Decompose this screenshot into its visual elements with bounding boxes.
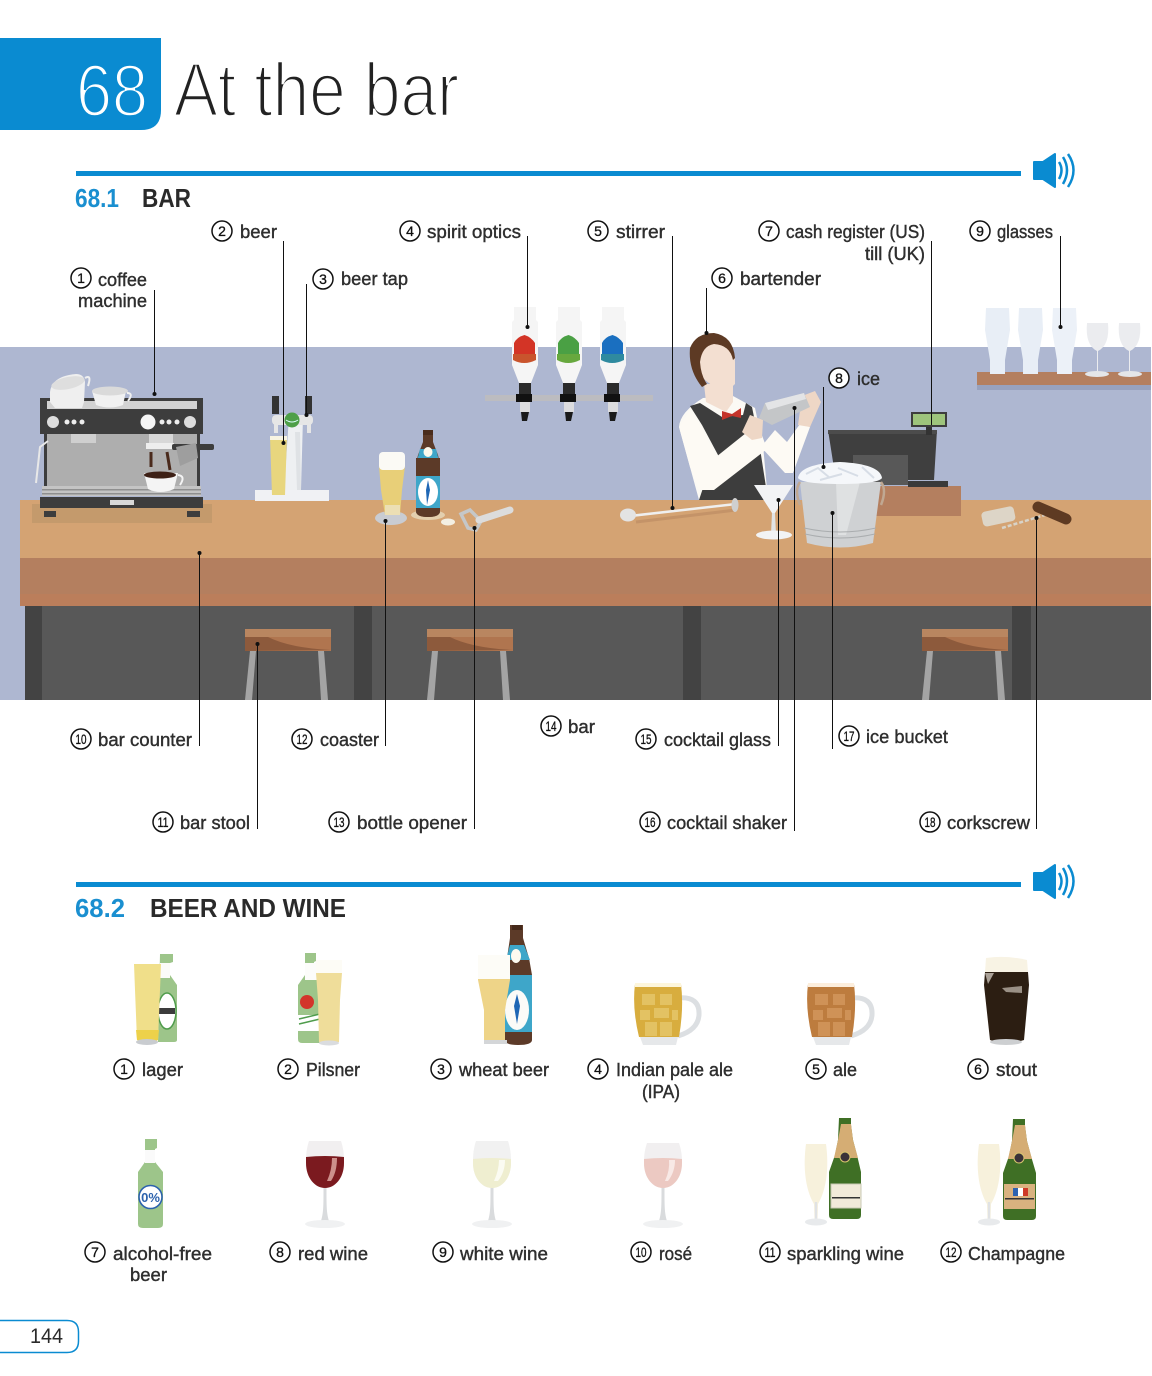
apron [690,403,768,500]
spirit optics [485,307,653,421]
label 8 red wine: 8 [276,1244,284,1260]
label 4 Indian pale ale: Indian pale ale [616,1060,733,1080]
label 14 bar: 14 [546,718,557,734]
label 8 ice: 8 [835,370,843,386]
section 68.1 header: 68.1 [75,183,119,213]
label 9 glasses [970,221,1053,242]
label 9 glasses: glasses [997,222,1053,242]
icon: Pilsner [298,953,342,1046]
label 14 bar: bar [568,717,595,737]
label 9 white wine: white wine [459,1244,548,1264]
label 4 Indian pale ale [588,1059,733,1102]
chapter number tab: 68 [76,51,148,132]
section 68.1 header: BAR [142,183,191,213]
cocktail shaker [759,393,810,425]
label 8 red wine [270,1242,368,1264]
beer bottle [411,430,445,520]
section 68.2 header [75,882,1021,923]
label 4 spirit optics: spirit optics [427,222,521,242]
label 3 wheat beer: 3 [437,1061,445,1077]
label 4 Indian pale ale: (IPA) [642,1082,680,1102]
chapter number tab [0,38,161,132]
label 8 ice [829,368,880,389]
label 17 ice bucket: 17 [844,728,855,744]
label 5 stirrer [588,221,665,242]
bar counter [20,500,1151,700]
label 6 bartender: 6 [718,270,726,286]
title: At the bar [174,48,459,133]
label 4 spirit optics: 4 [406,223,414,239]
label 6 bartender: bartender [740,269,821,289]
label 6 stout: stout [996,1060,1037,1080]
stirrer [620,498,738,522]
label 10 rosé: 10 [636,1244,647,1260]
icon: ale mug [807,983,872,1045]
label 11 sparkling wine: 11 [764,1244,776,1260]
label 6 stout [968,1059,1037,1080]
label 7 cash register [759,221,925,264]
icon: rosé [643,1143,683,1228]
label 9 glasses: 9 [976,223,984,239]
label 3 wheat beer: wheat beer [458,1060,549,1080]
leader lines [152,236,1062,831]
label 3 beer tap: beer tap [341,269,408,289]
wheat beer glass on coaster [375,452,407,525]
glasses on shelf [977,308,1151,390]
icon: red wine [305,1141,345,1228]
label 14 bar [541,716,595,737]
label 4 Indian pale ale: 4 [594,1061,602,1077]
ice bucket with ice [797,462,884,548]
label 15 cocktail glass: 15 [640,731,652,747]
label 18 corkscrew [920,812,1031,833]
bar scene [0,307,1151,700]
bar stools [245,629,1008,700]
label 18 corkscrew: corkscrew [947,813,1031,833]
cups on machine [50,374,85,408]
label 2 Pilsner: 2 [284,1061,292,1077]
label 1 coffee machine: coffee [98,270,147,290]
label 10 bar counter: 10 [76,731,87,747]
label 2 Pilsner: Pilsner [306,1060,360,1080]
label 17 ice bucket: ice bucket [866,727,948,747]
label 10 bar counter: bar counter [98,730,192,750]
label 5 ale: ale [833,1060,857,1080]
icon: audio speaker 2 [1034,865,1074,898]
label 1 lager: lager [142,1060,183,1080]
label 8 red wine: red wine [298,1244,368,1264]
wall [0,347,1151,700]
icon: audio speaker 1 [1034,154,1074,187]
label 12 coaster: 12 [296,731,308,747]
label 13 bottle opener: 13 [334,814,345,830]
beer tap and glass [255,396,329,501]
label 5 ale: 5 [812,1061,820,1077]
label 1 coffee machine: 1 [77,270,85,286]
label 2 Pilsner [278,1059,360,1080]
corkscrew [981,506,1066,528]
label 18 corkscrew: 18 [924,814,936,830]
torso shirt [679,396,768,500]
label 7 alcohol-free beer: alcohol-free [113,1244,212,1264]
label 11 sparkling wine: sparkling wine [787,1244,904,1264]
hands [742,415,763,440]
hair [690,333,735,387]
page number tab: 144 [30,1325,63,1348]
label 5 stirrer: 5 [594,223,602,239]
label 12 coaster [292,729,379,750]
icon: sparkling wine [805,1118,861,1226]
label 13 bottle opener: bottle opener [357,813,467,833]
label 3 beer tap: 3 [319,271,327,287]
label 16 cocktail shaker: 16 [644,814,656,830]
bottle opener [461,510,510,530]
icon: lager [134,954,177,1045]
bartender [679,333,821,500]
label 1 lager [114,1059,183,1080]
label 12 Champagne: 12 [946,1244,957,1260]
arms [679,410,767,490]
icon: alcohol-free beer: 0% [141,1190,160,1205]
coffee machine [32,374,214,523]
icon: alcohol-free beer [138,1139,163,1228]
icon: Indian pale ale mug [634,983,699,1045]
icon: stout [984,957,1029,1045]
label 3 beer tap [313,269,408,289]
label 2 beer [212,221,277,242]
label 9 white wine [433,1242,548,1264]
label 11 bar stool [153,812,250,833]
cocktail glass [754,485,793,540]
label 15 cocktail glass: cocktail glass [664,730,771,750]
label 11 bar stool: bar stool [180,813,250,833]
page number tab [0,1320,78,1352]
label 6 stout: 6 [974,1061,982,1077]
section 68.2 header: 68.2 [75,893,125,923]
icon: white wine [472,1141,512,1228]
label 7 cash register: cash register (US) [786,222,925,242]
label 7 cash register: till (UK) [865,244,925,264]
label 7 alcohol-free beer: beer [130,1265,167,1285]
section 68.2 header: BEER AND WINE [150,893,346,923]
label 5 ale [806,1059,857,1080]
label 6 bartender [712,268,821,289]
icon: Champagne [978,1119,1036,1226]
label 9 white wine: 9 [439,1244,447,1260]
label 16 cocktail shaker: cocktail shaker [667,813,787,833]
section 68.1 header [75,171,1021,213]
label 1 lager: 1 [120,1061,128,1077]
label 7 cash register: 7 [765,223,773,239]
label 1 coffee machine [71,268,147,311]
label 10 rosé: rosé [659,1244,692,1264]
label 10 rosé [631,1242,692,1264]
label 8 ice: ice [857,369,880,389]
neck and collar [704,384,733,412]
label 1 coffee machine: machine [78,291,147,311]
face [697,343,735,390]
cash register [828,412,961,516]
bottle cap [441,518,455,526]
label 2 beer: beer [240,222,277,242]
label 5 stirrer: stirrer [616,222,665,242]
label 12 Champagne: Champagne [968,1244,1065,1264]
label 11 bar stool: 11 [158,814,169,830]
label 2 beer: 2 [218,223,226,239]
label 12 coaster: coaster [320,730,379,750]
label 7 alcohol-free beer: 7 [91,1244,99,1260]
label 7 alcohol-free beer [85,1242,212,1285]
icon: wheat beer [478,925,532,1045]
